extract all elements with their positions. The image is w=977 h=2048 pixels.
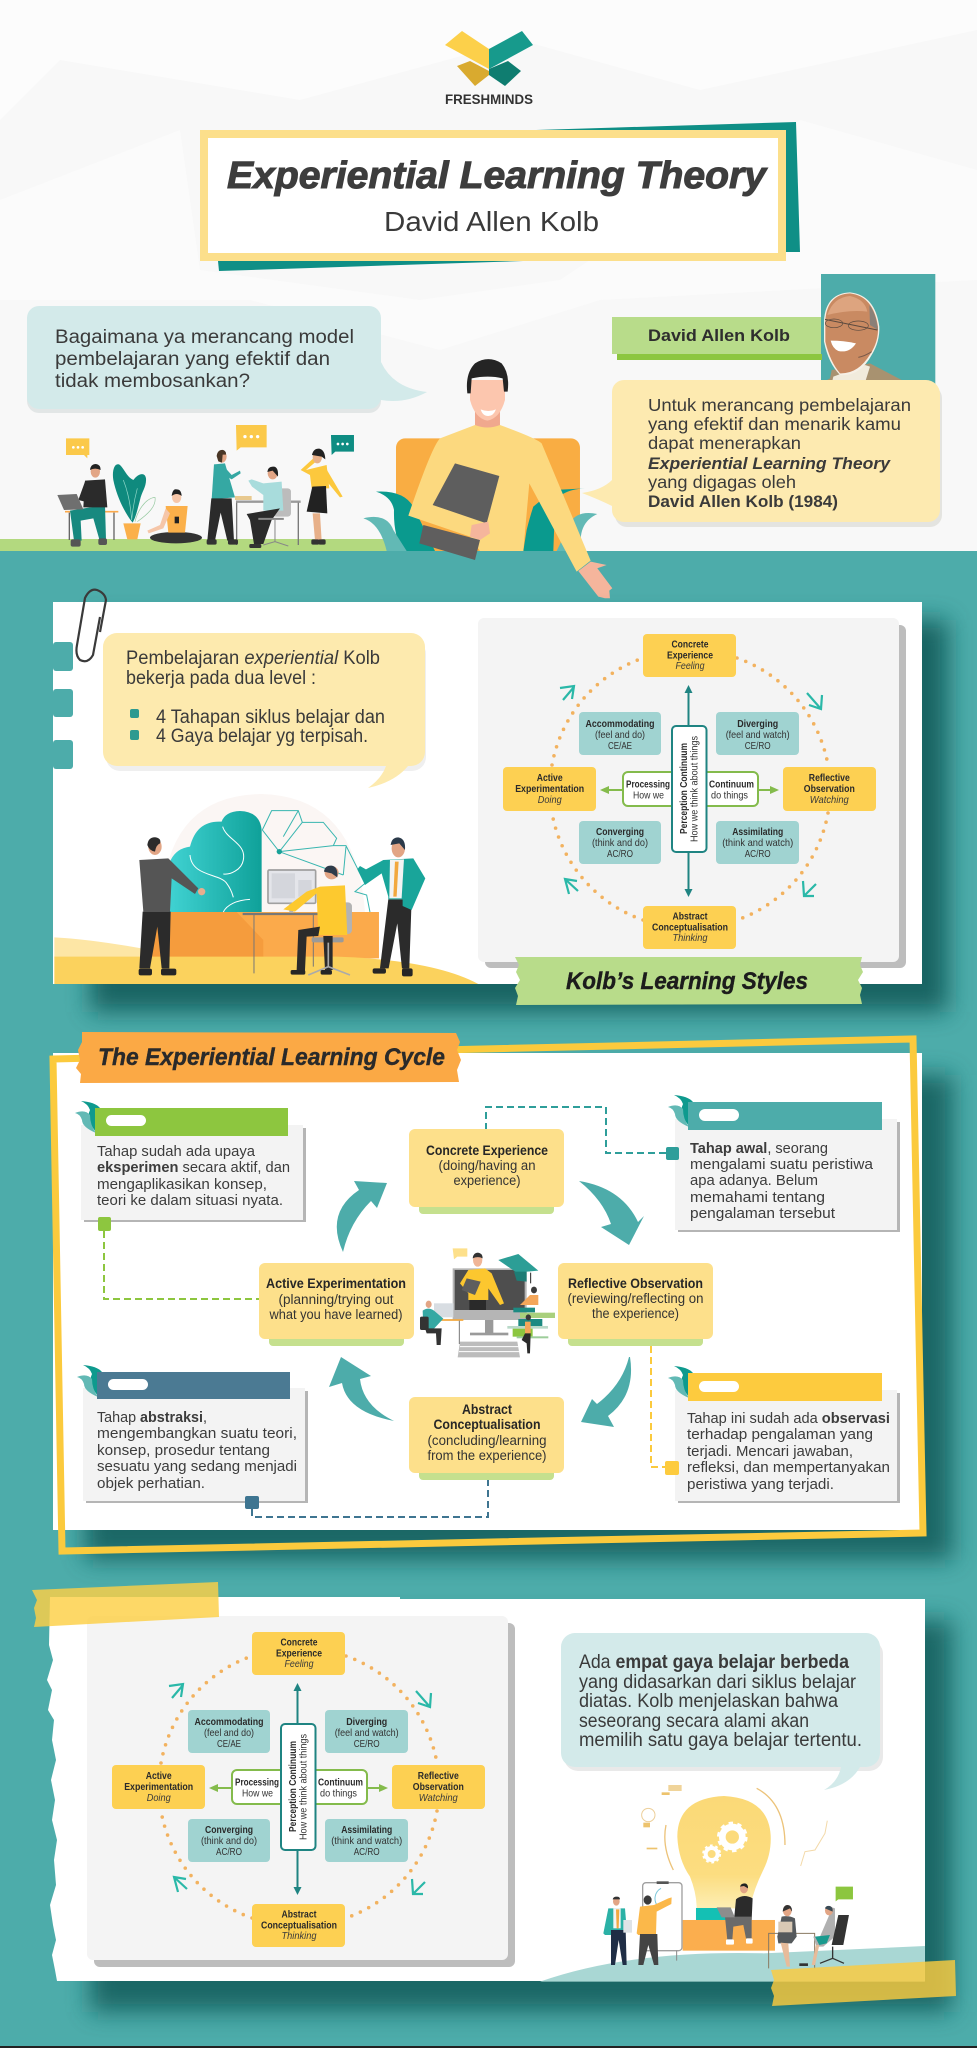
stage box: Reflective Observation: Reflective Observation (568, 1276, 703, 1291)
stage: Reflective Observation: Watching (419, 1792, 458, 1804)
woman on the phone (301, 449, 343, 545)
connector: abstract (252, 1473, 488, 1517)
perception continuum box: How we think about things (688, 736, 700, 842)
processing arrows (213, 1787, 384, 1789)
note: reflective observation: terhadap pengalaman yang (687, 1427, 873, 1443)
stage: Concrete Experience: Concrete (672, 638, 709, 650)
processing continuum box: Processing (235, 1776, 279, 1788)
banner: cycle title: The Experiential Learning Cycle (98, 1044, 445, 1071)
stage: Abstract Conceptualisation: Abstract (282, 1908, 317, 1920)
cycle arrows (169, 1684, 431, 1894)
whiteboard (643, 1881, 682, 1961)
teacher (460, 1253, 504, 1310)
speech bubble: two levels: 4 Tahapan siklus belajar dan (156, 707, 385, 728)
figure: central man (408, 359, 612, 598)
style box: Diverging: (feel and watch) (335, 1727, 399, 1739)
style box: Converging: (think and do) (201, 1835, 257, 1847)
speech bubble: answer: Untuk merancang pembelajaran (648, 395, 911, 415)
chair (396, 438, 580, 551)
style box: Diverging: Diverging (346, 1716, 387, 1728)
connector: concrete (486, 1107, 666, 1153)
stage: Abstract Conceptualisation: Conceptualisation (652, 922, 728, 934)
chat bubbles (66, 425, 354, 458)
graduation cap (498, 1254, 538, 1283)
man in teal jacket (357, 837, 425, 976)
stage box: Reflective Observation (558, 1263, 713, 1346)
stage: Concrete Experience (252, 1632, 345, 1675)
speech bubble: four styles: Ada empat gaya belajar berbeda (579, 1652, 849, 1673)
stage box: Concrete Experience: Concrete Experience (426, 1143, 548, 1158)
monitor (268, 870, 316, 913)
speech bubble: answer: yang digagas oleh (648, 472, 796, 492)
note: concrete experience: memahami tentang (690, 1190, 825, 1206)
style box: Diverging: Diverging (737, 718, 778, 730)
person meditating (147, 489, 202, 543)
paperclip (76, 590, 106, 661)
person with laptop (57, 464, 118, 547)
stage: Reflective Observation (392, 1765, 485, 1809)
stage: Active Experimentation (503, 767, 596, 811)
note: concrete experience (666, 1095, 900, 1232)
speech bubble: two levels (103, 633, 426, 788)
panel: four learning styles (47, 1597, 925, 1982)
note: abstract conceptualisation: Tahap abstraksi, (97, 1410, 207, 1426)
illustration: office people (57, 425, 354, 548)
two people at a desk (207, 450, 301, 548)
stage box: Active Experimentation (259, 1263, 414, 1346)
style box: Diverging: CE/RO (354, 1738, 380, 1750)
style box: Assimilating: (think and watch) (331, 1835, 402, 1847)
yellow frame (53, 1039, 923, 1551)
speech bubble: four styles (561, 1633, 883, 1790)
dotted cycle (552, 658, 828, 920)
stage: Active Experimentation: Doing (538, 794, 562, 806)
logo: Freshminds: FRESHMINDS (445, 92, 533, 107)
stage: Reflective Observation: Observation (804, 783, 855, 795)
style box: Assimilating: Assimilating (732, 826, 783, 838)
note: concrete experience: pengalaman tersebut (690, 1206, 835, 1222)
speech bubble: two levels: 4 Gaya belajar yg terpisah. (156, 726, 368, 747)
processing continuum box: do things (711, 790, 748, 802)
illustration: online learning (420, 1248, 555, 1357)
style box: Accommodating: (feel and do) (204, 1727, 254, 1739)
style box: Converging (579, 821, 661, 864)
stage box: Active Experimentation: what you have learned) (269, 1307, 402, 1322)
connector: reflective (651, 1346, 665, 1467)
style box: Diverging (716, 712, 799, 755)
note: abstract conceptualisation: sesuatu yang sedang menjadi (97, 1459, 297, 1475)
stage box: Concrete Experience: experience) (454, 1173, 520, 1188)
stage: Concrete Experience: Concrete (280, 1636, 318, 1648)
arrow: active to concrete (337, 1181, 387, 1252)
note: abstract conceptualisation: mengembangkan suatu teori, (97, 1426, 297, 1442)
stage: Reflective Observation: Reflective (809, 772, 850, 784)
teal background (0, 551, 977, 2048)
speech bubble: answer (582, 380, 942, 527)
shadow of card 3 (90, 1620, 952, 2012)
note: concrete experience: mengalami suatu peristiwa (690, 1157, 874, 1173)
note: active experimentation: eksperimen secara aktif, dan (97, 1160, 290, 1176)
stage: Concrete Experience: Experience (667, 650, 713, 662)
stage box: Concrete Experience (409, 1129, 564, 1214)
banner: Kolb's Learning Styles (515, 957, 863, 1005)
arrow: concrete to reflective (579, 1181, 644, 1245)
style box: Diverging: CE/RO (745, 740, 771, 752)
note: abstract conceptualisation: objek perhatian. (97, 1476, 205, 1492)
tape: bottom right (771, 1960, 956, 2006)
connector: active (104, 1231, 259, 1299)
stage box: Abstract Conceptualisation: from the experience) (428, 1448, 546, 1463)
style box: Diverging (325, 1710, 408, 1753)
speech bubble: answer: David Allen Kolb (1984) (648, 492, 838, 511)
tape: top left (32, 1582, 219, 1627)
stack of books (507, 1308, 555, 1338)
lightbulb (642, 1785, 827, 1908)
note: active experimentation: teori ke dalam situasi nyata. (97, 1193, 283, 1209)
style box: Accommodating: Accommodating (194, 1716, 264, 1728)
stage: Abstract Conceptualisation: Conceptualisation (261, 1920, 337, 1932)
style box: Assimilating: Assimilating (341, 1824, 392, 1836)
stage box: Active Experimentation: Active Experimentation (266, 1276, 406, 1291)
student reading (520, 1287, 538, 1353)
stage: Concrete Experience: Feeling (676, 660, 705, 672)
banner: Kolb's Learning Styles: Kolb’s Learning Styles (566, 968, 808, 995)
style box: Accommodating (579, 712, 661, 755)
style box: Accommodating: CE/AE (608, 740, 632, 752)
stage: Concrete Experience: Feeling (284, 1658, 314, 1670)
note: reflective observation (665, 1366, 900, 1503)
gears (703, 1823, 746, 1862)
processing continuum box: do things (320, 1788, 357, 1800)
stage box: Abstract Conceptualisation: Abstract (462, 1402, 512, 1417)
perception continuum box: Perception Continuum (678, 743, 690, 834)
speech bubble: question: pembelajaran yang efektif dan (55, 349, 330, 370)
note: abstract conceptualisation (77, 1365, 308, 1509)
stage: Concrete Experience: Experience (276, 1648, 322, 1660)
perception continuum box: Perception Continuum (287, 1741, 299, 1832)
paper background (0, 0, 977, 551)
style box: Assimilating: AC/RO (745, 848, 771, 860)
desk group (769, 1887, 853, 1968)
note: active experimentation: Tahap sudah ada upaya (97, 1144, 256, 1160)
stage box: Reflective Observation: the experience) (592, 1306, 679, 1321)
logo: Freshminds (445, 31, 533, 107)
network (262, 811, 370, 912)
stage: Reflective Observation: Observation (413, 1781, 464, 1793)
stage: Abstract Conceptualisation: Thinking (282, 1930, 317, 1942)
speech bubble: question: Bagaimana ya merancang model (55, 327, 354, 348)
portrait: David Allen Kolb (813, 274, 935, 388)
processing continuum box (623, 772, 758, 806)
style box: Assimilating (716, 821, 799, 864)
stage: Reflective Observation: Reflective (418, 1770, 459, 1782)
stage box: Active Experimentation: (planning/trying out (278, 1292, 394, 1307)
hill (540, 1946, 925, 1982)
speech bubble: answer: yang efektif dan menarik kamu (648, 414, 901, 434)
illustration: central man with folder (363, 438, 597, 551)
speech bubble: question (27, 306, 427, 413)
note: active experimentation: mengaplikasikan konsep, (97, 1177, 267, 1193)
arrow: reflective to abstract (581, 1357, 631, 1427)
speech bubble: two levels: bekerja pada dua level : (126, 668, 316, 689)
processing continuum box: How we (242, 1788, 273, 1800)
perception continuum box: How we think about things (298, 1734, 310, 1840)
perception continuum box (281, 1724, 316, 1850)
stage: Active Experimentation (112, 1765, 205, 1809)
title text: Experiential Learning Theory (227, 155, 768, 197)
binder tabs (53, 642, 73, 769)
speech bubble: four styles: seseorang secara alami akan (579, 1711, 809, 1732)
arrow: abstract to active (329, 1357, 394, 1421)
note: reflective observation: Tahap ini sudah ada observasi (687, 1411, 890, 1427)
folder (419, 463, 499, 560)
note: abstract conceptualisation: konsep, prosedur tentang (97, 1443, 270, 1459)
shadow of card 2 (85, 1075, 953, 1560)
teal band over chair base (392, 551, 612, 553)
stage: Reflective Observation (783, 767, 876, 811)
leaf (668, 1095, 693, 1127)
ground strip (0, 539, 392, 551)
bottom edge line (0, 2046, 977, 2048)
stage box: Abstract Conceptualisation: (concluding/learning (428, 1433, 546, 1448)
leaves (363, 488, 597, 551)
stage: Abstract Conceptualisation: Thinking (672, 932, 708, 944)
name label: David Allen Kolb: David Allen Kolb (648, 327, 790, 345)
student at desk (420, 1301, 463, 1345)
stage: Active Experimentation: Active (146, 1770, 172, 1782)
style box: Accommodating (188, 1710, 270, 1753)
speech bubble: four styles: yang didasarkan dari siklus belajar (579, 1672, 857, 1693)
speech bubble: two levels: Pembelajaran experiential Kolb (126, 648, 380, 669)
processing continuum box (232, 1770, 367, 1804)
name label: David Allen Kolb (612, 317, 822, 360)
speech bubble: question: tidak membosankan? (55, 371, 250, 392)
processing arrows (604, 789, 775, 791)
note: concrete experience: Tahap awal, seorang (690, 1141, 828, 1157)
illustration: lightbulb and team (540, 1785, 925, 1982)
stage: Active Experimentation: Experimentation (124, 1781, 193, 1793)
note: reflective observation: terjadi. Mencari jawaban, (687, 1444, 853, 1460)
speech bubble: answer: Experiential Learning Theory (648, 454, 892, 473)
stage box: Reflective Observation: (reviewing/reflecting on (568, 1291, 704, 1306)
stage box: Abstract Conceptualisation: Conceptualisation (434, 1417, 540, 1432)
people at whiteboard (603, 1895, 672, 1965)
stage: Active Experimentation: Experimentation (515, 783, 584, 795)
style box: Converging: Converging (205, 1824, 253, 1836)
style box: Accommodating: Accommodating (586, 718, 654, 730)
illustration: brain and team (54, 794, 478, 984)
stage: Abstract Conceptualisation (252, 1904, 345, 1947)
speech bubble: four styles: diatas. Kolb menjelaskan bahwa (579, 1691, 838, 1712)
man in grey suit (139, 837, 205, 975)
speech bubble: answer: dapat menerapkan (648, 433, 801, 453)
perception arrows (688, 690, 690, 892)
style box: Accommodating: CE/AE (217, 1738, 241, 1750)
leaf (75, 1101, 100, 1133)
style box: Assimilating (325, 1819, 408, 1862)
processing continuum box: Continuum (318, 1776, 363, 1788)
panel: The Experiential Learning Cycle (53, 1032, 923, 1551)
plant (113, 464, 155, 539)
style box: Accommodating: (feel and do) (595, 729, 645, 741)
perception arrows (296, 1688, 298, 1890)
dotted cycle (161, 1656, 437, 1918)
note: active experimentation (75, 1101, 306, 1231)
note: concrete experience: apa adanya. Belum (690, 1173, 818, 1189)
perception continuum box (672, 726, 706, 852)
style box: Converging: AC/RO (216, 1846, 242, 1858)
processing continuum box: How we (633, 790, 664, 802)
block and box (683, 1908, 775, 1951)
stage box: Concrete Experience: (doing/having an (438, 1158, 536, 1173)
style box: Assimilating: AC/RO (354, 1846, 380, 1858)
man with laptop (717, 1883, 753, 1945)
panel: experiential levels (53, 590, 922, 984)
style box: Converging: Converging (596, 826, 644, 838)
style box: Assimilating: (think and watch) (722, 837, 793, 849)
cycle arrows (560, 686, 822, 896)
banner: cycle title (76, 1032, 461, 1083)
stage: Concrete Experience (643, 634, 736, 677)
brain (169, 811, 262, 912)
processing continuum box: Processing (626, 778, 670, 790)
subtitle: David Allen Kolb (384, 206, 599, 237)
leaf (668, 1366, 693, 1398)
seated man (283, 866, 352, 975)
shadow of card 1 (90, 620, 948, 1012)
diagram panel: copy of Kolb's styles (87, 1616, 515, 1967)
note: reflective observation: refleksi, dan mempertanyakan (687, 1460, 890, 1476)
panel: Kolb's learning styles diagram (478, 618, 906, 968)
speech bubble: four styles: memilih satu gaya belajar tertentu. (579, 1730, 862, 1751)
stage: Abstract Conceptualisation: Abstract (672, 910, 708, 922)
stage: Abstract Conceptualisation (643, 906, 736, 949)
style box: Converging (188, 1819, 270, 1862)
stage: Active Experimentation: Doing (147, 1792, 171, 1804)
style box: Diverging: (feel and watch) (726, 729, 790, 741)
leaf (77, 1365, 102, 1397)
note: reflective observation: peristiwa yang terjadi. (687, 1477, 834, 1493)
stage: Reflective Observation: Watching (810, 794, 849, 806)
title panel (204, 122, 800, 271)
style box: Converging: AC/RO (607, 848, 633, 860)
stage box: Abstract Conceptualisation (409, 1397, 564, 1480)
style box: Converging: (think and do) (592, 837, 648, 849)
processing continuum box: Continuum (709, 778, 754, 790)
stage: Active Experimentation: Active (537, 772, 563, 784)
